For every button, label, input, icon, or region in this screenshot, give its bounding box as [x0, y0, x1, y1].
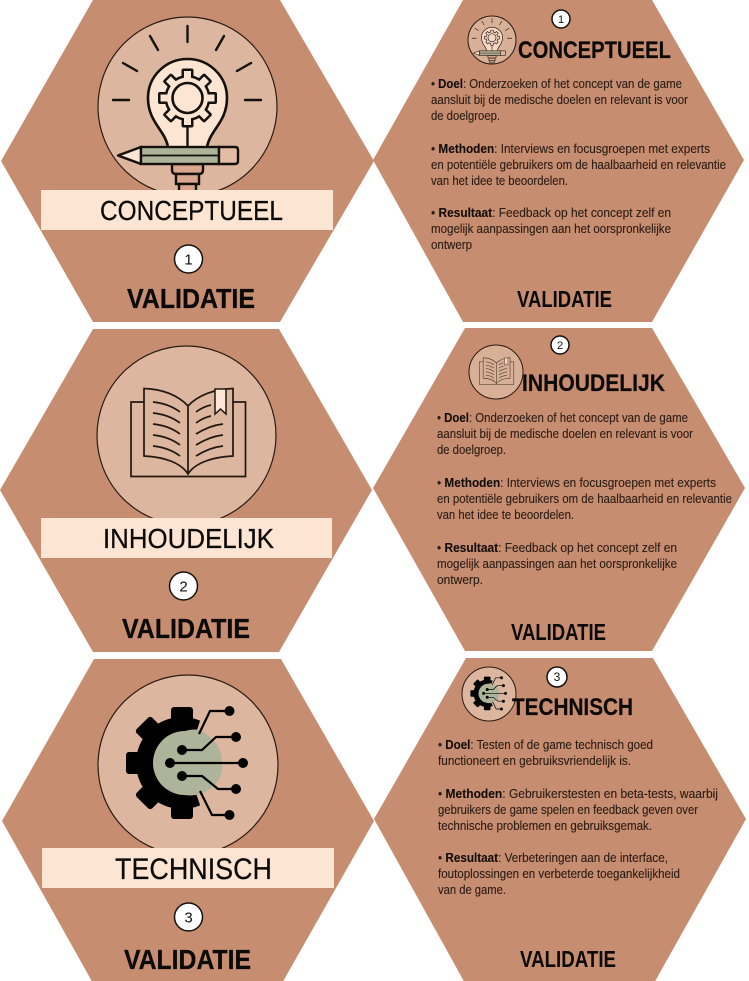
- text block: methoden: [431, 142, 726, 188]
- text block: methoden: [437, 476, 732, 522]
- text block: methoden: [438, 787, 718, 833]
- text block: doel: • Doel: Onderzoeken of het concept van de game: [431, 77, 682, 91]
- panel: technisch cover: [2, 659, 374, 981]
- text block: resultaat: • Resultaat: Feedback op het concept zelf en: [431, 206, 671, 220]
- hexagon background: [1, 0, 374, 322]
- text block: methoden: en potentiële gebruikers om de haalbaarheid en relevantie: [431, 158, 726, 172]
- text block: doel: • Doel: Onderzoeken of het concept van de game: [437, 411, 688, 425]
- text block: doel: de doelgroep.: [431, 109, 500, 123]
- text block: doel: • Doel: Testen of de game technisch goed: [438, 738, 653, 752]
- number badge 1 small: 1: [558, 14, 564, 26]
- panel: conceptueel cover: [1, 0, 374, 322]
- label band: [41, 518, 332, 558]
- panel: inhoudelijk details: [373, 328, 745, 651]
- text block: resultaat: • Resultaat: Verbeteringen aan de interface,: [438, 851, 668, 865]
- icon: light bulb with gear and pencil: [98, 17, 277, 196]
- footer: validatie: VALIDATIE: [127, 283, 255, 314]
- heading: conceptueel: CONCEPTUEEL: [100, 195, 283, 226]
- number badge 1: 1: [184, 252, 193, 268]
- number badge 3 small: 3: [554, 670, 561, 684]
- text block: methoden: van het idee te beoordelen.: [431, 174, 568, 188]
- text block: resultaat: [431, 206, 671, 252]
- label band: [41, 190, 333, 230]
- footer: validatie: VALIDATIE: [520, 946, 616, 972]
- text block: methoden: • Methoden: Interviews en focusgroepen met experts: [437, 476, 716, 490]
- icon: open book: [97, 346, 276, 525]
- text block: resultaat: • Resultaat: Feedback op het concept zelf en: [437, 541, 677, 555]
- text block: doel: de doelgroep.: [437, 443, 506, 457]
- text block: doel: aansluit bij de medische doelen en relevant is voor: [437, 427, 693, 441]
- text block: doel: [437, 411, 693, 457]
- icon: small open book: [469, 345, 523, 399]
- text block: doel: [431, 77, 688, 123]
- number badge 2: [170, 572, 198, 600]
- icon: gear with circuit lines: [98, 675, 278, 855]
- text block: doel: [438, 738, 653, 768]
- number badge 3 small: [547, 667, 567, 687]
- text block: resultaat: mogelijk aanpassingen aan het oorspronkelijke: [431, 222, 671, 236]
- panel: inhoudelijk cover: [0, 329, 372, 652]
- text block: resultaat: ontwerp: [431, 238, 472, 252]
- label band: [42, 848, 334, 888]
- hexagon background: [2, 659, 374, 981]
- text block: doel: aansluit bij de medische doelen en relevant is voor: [431, 93, 688, 107]
- number badge 1 small: [552, 10, 570, 28]
- icon: small gear with circuit lines: [462, 667, 516, 721]
- text block: methoden: technische problemen en gebruiksgemak.: [438, 819, 652, 833]
- heading: conceptueel: CONCEPTUEEL: [518, 37, 671, 64]
- number badge 2 small: 2: [557, 340, 563, 352]
- footer: validatie: VALIDATIE: [124, 944, 251, 975]
- text block: resultaat: van de game.: [438, 883, 506, 897]
- number badge 3: 3: [184, 910, 193, 926]
- footer: validatie: VALIDATIE: [122, 613, 250, 644]
- text block: resultaat: [437, 541, 677, 587]
- text block: methoden: gebruikers de game spelen en feedback geven over: [438, 803, 698, 817]
- number badge 2: 2: [179, 578, 188, 596]
- hexagon background: [373, 0, 744, 322]
- icon: small light bulb: [468, 16, 516, 64]
- footer: validatie: VALIDATIE: [511, 619, 606, 645]
- text block: methoden: • Methoden: Interviews en focusgroepen met experts: [431, 142, 710, 156]
- text block: resultaat: [438, 851, 680, 897]
- footer: validatie: VALIDATIE: [517, 286, 612, 312]
- number badge 3: [174, 903, 202, 931]
- hexagon background: [0, 329, 372, 652]
- text block: methoden: • Methoden: Gebruikerstesten en beta-tests, waarbij: [438, 787, 718, 801]
- panel: technisch details: [374, 658, 746, 981]
- heading: technisch: TECHNISCH: [115, 853, 272, 886]
- number badge 1: [174, 245, 202, 273]
- hexagon background: [374, 658, 746, 981]
- heading: inhoudelijk: INHOUDELIJK: [103, 523, 274, 554]
- heading: technisch: TECHNISCH: [512, 694, 633, 721]
- panel: conceptueel details: [373, 0, 744, 322]
- text block: resultaat: foutoplossingen en verbeterde toegankelijkheid: [438, 867, 680, 881]
- text block: resultaat: ontwerp.: [437, 573, 483, 587]
- text block: doel: functioneert en gebruiksvriendelijk is.: [438, 754, 631, 768]
- text block: resultaat: mogelijk aanpassingen aan het oorspronkelijke: [437, 557, 677, 571]
- heading: inhoudelijk: INHOUDELIJK: [522, 370, 666, 397]
- number badge 2 small: [551, 336, 569, 354]
- hexagon background: [373, 328, 745, 651]
- text block: methoden: van het idee te beoordelen.: [437, 508, 574, 522]
